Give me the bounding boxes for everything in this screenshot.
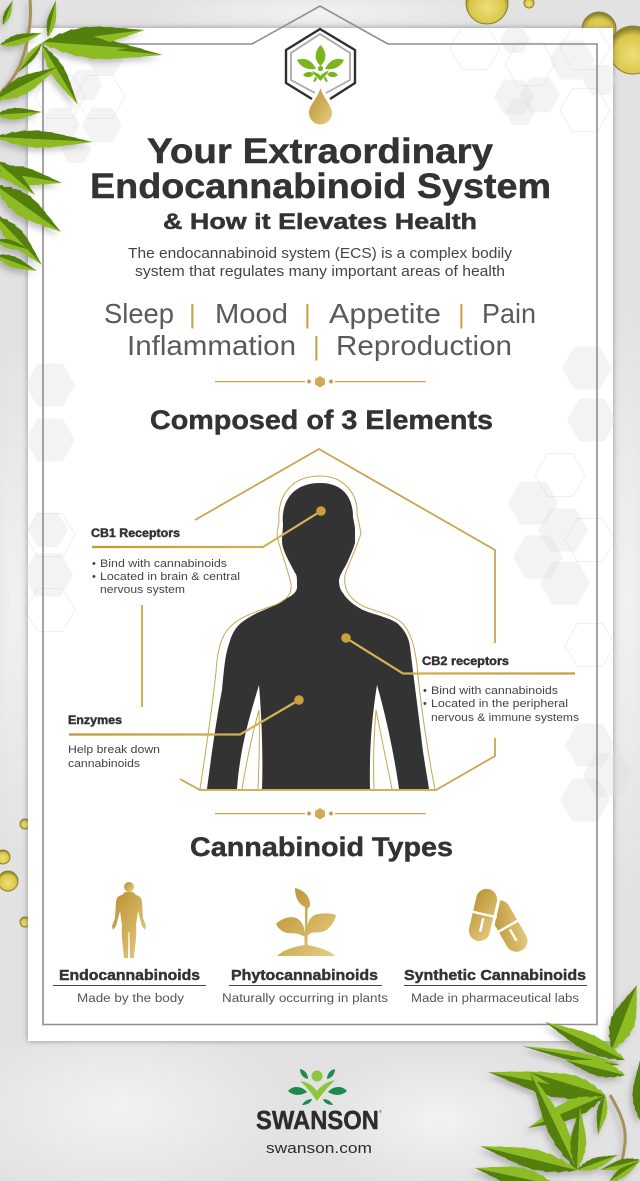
CB1 bullets: • xyxy=(92,558,96,570)
oil drops xyxy=(0,0,640,927)
icon: capsules xyxy=(463,885,533,957)
capsule 2 xyxy=(483,895,533,957)
emblem gray hexagon xyxy=(291,34,350,93)
divider xyxy=(215,376,426,388)
CB2 callout xyxy=(341,633,580,724)
body gold outline xyxy=(200,476,435,789)
title xyxy=(90,132,551,234)
CB2 bullets: nervous & immune systems xyxy=(431,712,580,724)
brand logo xyxy=(256,1069,382,1157)
health areas list: Inflammation xyxy=(127,330,296,361)
hexagon wireframe xyxy=(25,26,615,667)
CB1 callout xyxy=(91,506,326,596)
CB1 bullets: • xyxy=(92,571,96,583)
enzymes description: Help break down xyxy=(68,744,160,756)
intro text: The endocannabinoid system (ECS) is a complex bodily xyxy=(128,246,513,262)
health areas list: | xyxy=(313,331,320,361)
CB1 dot xyxy=(316,506,326,516)
body silhouette xyxy=(200,476,435,789)
CB2 bullets: Bind with cannabinoids xyxy=(431,685,559,697)
heading: composed of 3 elements: Composed of 3 Elements xyxy=(150,405,493,435)
CB2 bullets: Located in the peripheral xyxy=(431,698,568,710)
emblem green leaves xyxy=(297,45,344,82)
health areas list: | xyxy=(189,299,196,329)
diagram: gold hexagon frame xyxy=(142,449,495,790)
CB2 dot xyxy=(341,633,351,643)
emblem oil drop xyxy=(309,88,332,124)
CB2 bullets: • xyxy=(423,685,427,697)
health areas list: | xyxy=(304,299,311,329)
title: Endocannabinoid System xyxy=(90,167,551,206)
enzymes description xyxy=(68,744,160,770)
CB2 leader line xyxy=(346,638,575,674)
CB1 bullets xyxy=(92,558,240,596)
card inner border xyxy=(43,6,597,1024)
logo mark xyxy=(288,1069,347,1105)
registered mark: ® xyxy=(379,1109,382,1114)
plant stem xyxy=(0,0,31,95)
plant stem xyxy=(610,1095,625,1181)
intro text: system that regulates many important areas of health xyxy=(135,264,505,280)
divider xyxy=(215,808,426,820)
enzymes dot xyxy=(294,695,304,705)
icon: human body xyxy=(112,882,146,958)
enzymes description: cannabinoids xyxy=(68,758,141,770)
CB1 leader line xyxy=(92,511,321,547)
label: Endocannabinoids xyxy=(59,967,200,984)
enzymes label: Enzymes xyxy=(68,715,122,727)
health areas list: Appetite xyxy=(329,298,441,329)
column: phytocannabinoids xyxy=(222,888,388,1005)
hexagon decoration xyxy=(23,27,633,822)
health areas list: Mood xyxy=(215,298,288,329)
icon: sprout xyxy=(276,888,336,956)
CB2 label: CB2 receptors xyxy=(422,656,509,668)
capsule 1 xyxy=(463,885,503,945)
description: Made by the body xyxy=(77,993,184,1005)
health areas list: Sleep xyxy=(104,298,174,329)
CB1 bullets: Located in brain & central xyxy=(100,571,240,583)
description: Naturally occurring in plants xyxy=(222,993,388,1005)
enzymes callout xyxy=(68,695,304,770)
heading: cannabinoid types: Cannabinoid Types xyxy=(190,832,453,862)
health areas list: Pain xyxy=(482,298,536,329)
intro text xyxy=(128,246,513,280)
bottom right plant xyxy=(473,980,640,1181)
CB2 bullets xyxy=(423,685,580,724)
CB2 bullets: • xyxy=(423,698,427,710)
health areas list: | xyxy=(458,299,465,329)
CB1 bullets: nervous system xyxy=(100,584,185,596)
CB1 label: CB1 Receptors xyxy=(91,528,180,540)
white card xyxy=(28,28,613,1041)
emblem dark hexagon xyxy=(286,29,355,99)
label: Phytocannabinoids xyxy=(231,967,378,984)
top emblem xyxy=(286,29,355,124)
label: Synthetic Cannabinoids xyxy=(404,967,586,984)
title: Your Extraordinary xyxy=(147,132,494,171)
column: endocannabinoids xyxy=(53,882,206,1005)
wordmark: SWANSON xyxy=(256,1105,379,1135)
body dark figure xyxy=(207,483,429,789)
health areas list: Reproduction xyxy=(336,330,512,361)
CB1 bullets: Bind with cannabinoids xyxy=(100,558,228,570)
left plant xyxy=(0,0,164,276)
column: synthetic cannabinoids xyxy=(404,885,587,1005)
website: swanson.com xyxy=(266,1140,372,1157)
health areas list xyxy=(104,298,536,361)
enzymes leader line xyxy=(69,700,299,734)
title: & How it Elevates Health xyxy=(163,209,477,234)
description: Made in pharmaceutical labs xyxy=(411,993,579,1005)
